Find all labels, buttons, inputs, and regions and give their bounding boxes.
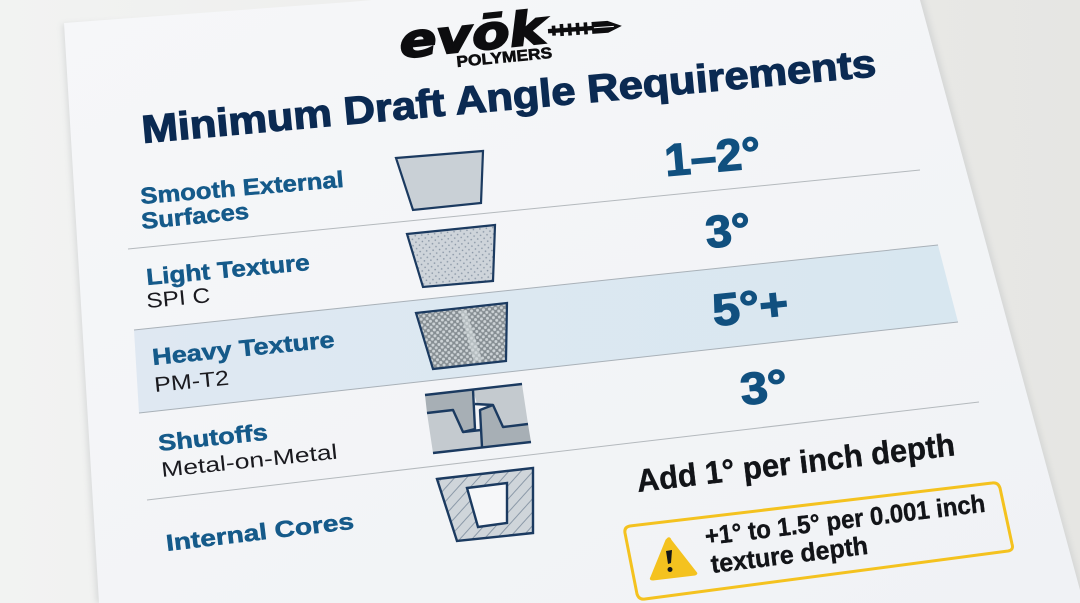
icon: heavy texture profile [416,303,507,369]
icon: smooth draft profile [396,151,483,210]
value: 1-2 degrees: 1–2° [662,127,763,186]
row: heavy texture [151,278,791,397]
label: internal cores: Internal Cores [165,508,355,556]
logo screw mark [548,20,622,37]
label: smooth external surfaces: Surfaces [140,198,250,234]
callout text [703,490,987,579]
callout text: +1° to 1.5° per 0.001 inch [703,490,987,551]
icon: light texture profile [407,225,495,287]
value: add 1 degree per inch depth: Add 1° per inch depth [635,426,957,499]
row: shutoffs [157,359,790,482]
callout border [625,483,1012,599]
sublabel: SPI C: SPI C [145,284,211,313]
label: smooth external surfaces [139,166,345,234]
icon: warning triangle [650,538,697,580]
sublabel: PM-T2: PM-T2 [153,367,230,397]
value: 3 degrees: 3° [738,359,790,415]
row: internal cores [165,426,957,556]
sublabel: metal-on-metal: Metal-on-Metal [160,441,339,482]
highlight band: heavy texture [134,245,958,413]
callout text: texture depth [709,532,870,579]
label: shutoffs: Shutoffs [157,419,269,456]
icon: internal core section [437,468,533,541]
value: 3 degrees: 3° [703,203,753,258]
logo subtitle: POLYMERS [456,45,553,71]
callout: texture depth note [625,483,1012,599]
title: Minimum Draft Angle Requirements [140,42,878,152]
row: smooth external surfaces [139,127,763,234]
label: light texture: Light Texture [145,249,311,290]
row: light texture [145,203,753,313]
logo: evok polymers [397,0,622,71]
value: 5 degrees plus: 5°+ [710,278,791,336]
label: smooth external surfaces: Smooth External [139,166,345,209]
logo wordmark: evōk [397,0,551,69]
label: heavy texture: Heavy Texture [151,326,336,370]
icon: shutoff interlock [425,384,531,453]
